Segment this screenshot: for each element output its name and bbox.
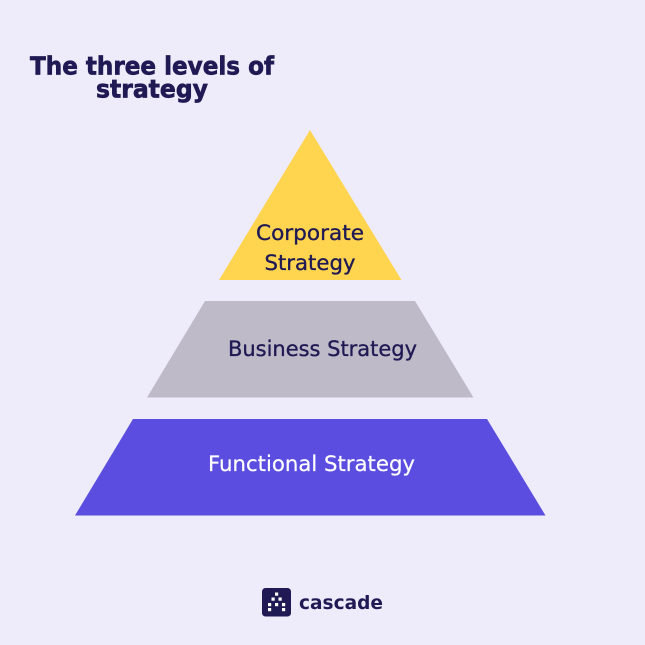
pyramid tier: business strategy (147, 301, 474, 398)
pyramid tier: functional strategy (75, 419, 546, 516)
pyramid tier: corporate strategy: Strategy (264, 251, 356, 275)
title (30, 52, 275, 104)
pyramid tier: functional strategy: Functional Strategy (208, 452, 415, 476)
title: The three levels of (30, 52, 275, 80)
pyramid tier: corporate strategy (219, 130, 402, 280)
icon: cascade mark (262, 588, 291, 616)
logo: cascade (262, 588, 383, 616)
pyramid tier: corporate strategy: Corporate (256, 221, 364, 245)
title: strategy (96, 74, 208, 104)
pyramid tier: business strategy: Business Strategy (228, 337, 417, 361)
logo wordmark: cascade (299, 592, 383, 614)
